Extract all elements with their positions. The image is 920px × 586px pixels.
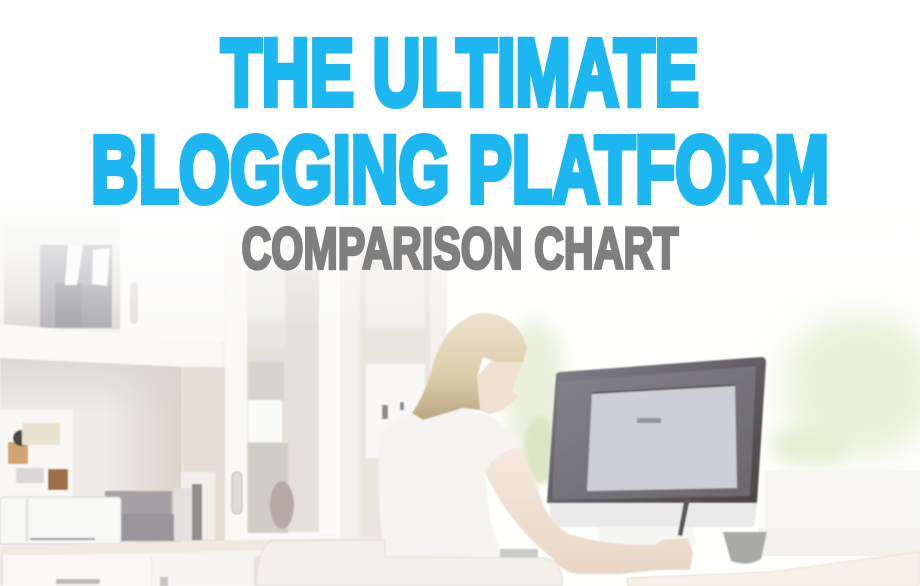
magazine files <box>40 245 112 328</box>
subtitle: COMPARISON CHART <box>242 216 678 282</box>
upper cabinet door <box>120 210 224 342</box>
white t-shirt <box>379 408 522 558</box>
top white fade <box>0 0 920 330</box>
glass cabinet <box>225 200 340 540</box>
monitor stand <box>597 527 697 547</box>
framed pictures <box>366 270 425 328</box>
lower wall <box>0 358 182 545</box>
face <box>477 362 523 414</box>
pinboard <box>0 410 73 498</box>
counter and drawers <box>0 537 385 586</box>
search page logo <box>637 418 661 423</box>
upper shelf interior <box>4 225 120 329</box>
hair <box>412 313 527 420</box>
pen <box>678 497 690 536</box>
browser window <box>587 384 737 491</box>
paper on desk <box>500 549 538 558</box>
photo: woman blogging at a desk in a home office <box>0 150 920 586</box>
window background with foliage <box>440 200 920 586</box>
coffee cup <box>723 532 767 564</box>
baskets and books <box>105 472 215 541</box>
monitor <box>547 357 766 547</box>
title <box>91 20 829 282</box>
printer <box>0 497 121 544</box>
arm <box>485 447 693 574</box>
left wall and cabinetry <box>0 150 447 586</box>
shelf ledge <box>0 324 221 367</box>
desk <box>627 552 919 586</box>
chair <box>256 540 562 586</box>
title line 1: THE ULTIMATE <box>221 20 699 126</box>
woman <box>379 313 693 574</box>
